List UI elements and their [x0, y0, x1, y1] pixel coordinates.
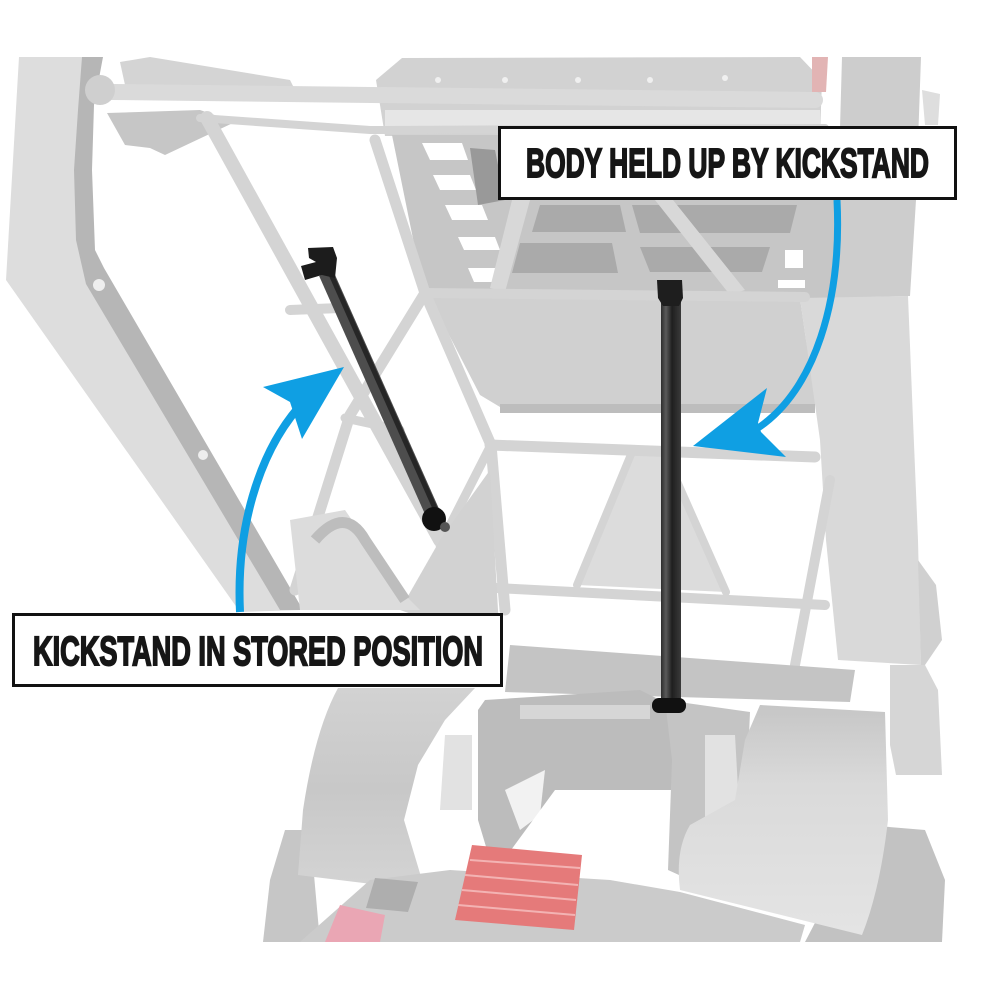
left hinge bracket — [107, 110, 235, 155]
stored shaft — [326, 273, 434, 516]
arrow: to stored kickstand — [240, 367, 344, 612]
right fender — [679, 705, 888, 935]
left tire — [263, 830, 320, 942]
electronics base — [300, 870, 805, 942]
arrow: to deployed kickstand — [693, 200, 838, 457]
left body panel — [6, 57, 303, 612]
kickstand stored position — [301, 247, 450, 532]
left fender — [298, 688, 475, 890]
red label — [325, 905, 385, 942]
label: stored position — [14, 614, 502, 686]
top deck plate — [376, 57, 828, 136]
right body panel — [800, 57, 942, 775]
label: stored position: KICKSTAND IN STORED POSITION — [33, 628, 483, 674]
kickstand deployed — [652, 280, 686, 713]
deployed top cap — [657, 280, 683, 306]
upper link plate — [120, 57, 300, 100]
deployed shaft — [661, 300, 681, 702]
rear frame panel — [505, 645, 855, 702]
stored clip — [301, 247, 337, 280]
label: body held up — [500, 128, 956, 198]
triangle plate — [577, 452, 726, 592]
left corner hinge ball — [85, 75, 115, 105]
electronics rack — [392, 135, 838, 300]
rear suspension — [440, 690, 750, 880]
central plate — [430, 298, 818, 410]
center floor — [500, 790, 670, 880]
deployed foot — [652, 698, 686, 713]
connector block — [366, 878, 418, 912]
right tire — [805, 825, 945, 942]
tubular cage frame — [112, 92, 830, 665]
stored foot — [422, 507, 446, 531]
red speed controller — [455, 845, 582, 930]
